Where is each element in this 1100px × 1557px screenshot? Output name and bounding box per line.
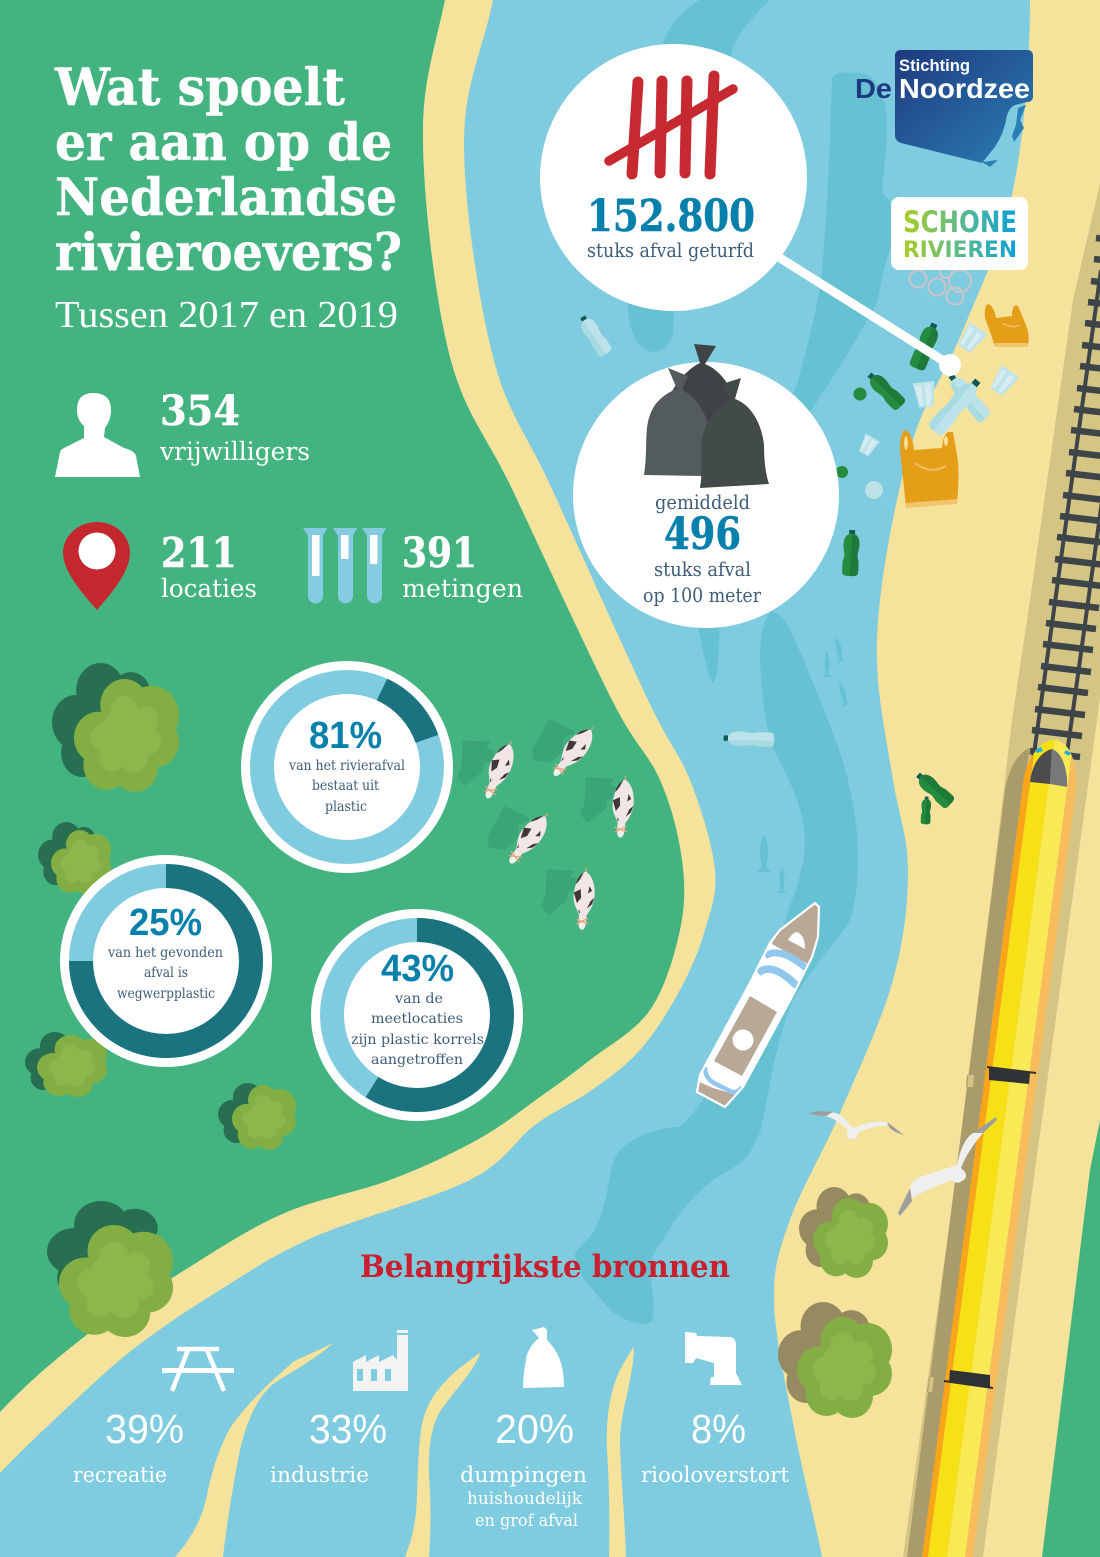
left green meadow — [0, 0, 684, 1412]
icon: garbage bags — [644, 344, 769, 488]
icon: map pin — [63, 522, 130, 610]
circle: average per 100 meter — [573, 344, 839, 628]
source: sewer overflow — [641, 1332, 790, 1487]
logo: Schone Rivieren: RIVIEREN — [903, 238, 1017, 263]
source: recreation: 39% — [105, 1406, 184, 1452]
seagull 2 — [898, 1117, 997, 1216]
source: recreation: recreatie — [73, 1463, 167, 1487]
donut: 81% plastic: 81% — [309, 715, 382, 757]
stat: measurements: 391 — [402, 529, 477, 577]
donut: 25% single-use plastic: afval is — [144, 965, 188, 981]
title: er aan op de — [55, 113, 392, 173]
icon: pipe — [685, 1332, 742, 1385]
title — [54, 58, 402, 283]
average caption — [643, 557, 761, 607]
donut: 43% plastic pellets: van de — [394, 991, 443, 1007]
title: Nederlandse — [55, 168, 397, 228]
donut: 25% single-use plastic — [60, 855, 272, 1067]
logo: Stichting De Noordzee — [855, 50, 1033, 167]
source: recreation — [73, 1349, 234, 1487]
railway ballast — [903, 183, 1100, 1557]
logo: Schone Rivieren: SCHONE — [903, 205, 1017, 239]
circle: total litter count — [540, 44, 807, 311]
stat: volunteers: 354 — [160, 387, 240, 435]
boat — [692, 900, 822, 1110]
yellow train — [922, 730, 1090, 1557]
stat: volunteers: vrijwilligers — [159, 437, 310, 466]
logo: Stichting De Noordzee: Noordzee — [899, 73, 1030, 104]
source: industry: 33% — [309, 1406, 387, 1452]
tree 2 — [38, 822, 111, 894]
source: dumping: dumpingen — [460, 1463, 587, 1487]
connector line — [780, 258, 961, 376]
tree 3 — [25, 1032, 107, 1097]
title: Wat spoelt — [54, 58, 345, 118]
source: dumping — [460, 1327, 587, 1531]
icon: person — [55, 393, 140, 477]
donut: 43% plastic pellets: 43% — [381, 948, 454, 990]
donut: 81% plastic: bestaat uit — [312, 778, 379, 794]
tree 5 — [47, 1201, 173, 1337]
source: sewer overflow: 8% — [691, 1406, 746, 1452]
logo: Schone Rivieren — [891, 197, 1028, 270]
donut: 81% plastic: plastic — [325, 799, 367, 815]
six-pack rings — [910, 266, 971, 304]
source: dumping: huishoudelijk — [467, 1489, 583, 1509]
stat: locations: 211 — [161, 529, 237, 577]
stat: measurements — [303, 528, 523, 604]
donut: 81% plastic — [241, 661, 453, 873]
heading: main sources: Belangrijkste bronnen — [360, 1249, 730, 1285]
subtitle: Tussen 2017 en 2019 — [55, 294, 398, 336]
stat: locations: locaties — [161, 574, 257, 603]
source: dumping: 20% — [495, 1406, 574, 1452]
donut: 43% plastic pellets — [311, 909, 523, 1121]
donut: 81% plastic: van het rivierafval — [288, 758, 405, 774]
train shadow — [907, 748, 1030, 1557]
source: dumping: en grof afval — [475, 1511, 578, 1531]
donut: 43% plastic pellets: meetlocaties — [371, 1011, 463, 1027]
average label: gemiddeld — [655, 490, 750, 514]
donut: 25% single-use plastic: van het gevonden — [107, 945, 223, 961]
tree 1 — [52, 663, 179, 792]
total number: 152.800 — [587, 191, 755, 242]
source: industry — [270, 1330, 408, 1487]
icon: test tubes — [303, 528, 386, 604]
seagull 1 — [809, 1111, 904, 1139]
icon: factory — [353, 1330, 408, 1391]
icon: waste sack — [523, 1327, 564, 1388]
total caption: stuks afval geturfd — [587, 238, 754, 262]
tree 4 — [218, 1083, 296, 1150]
stat: locations — [63, 522, 257, 610]
fish silhouettes — [757, 636, 850, 893]
stat: volunteers — [55, 387, 310, 477]
donut: 25% single-use plastic: wegwerpplastic — [117, 986, 215, 1002]
logo: Stichting De Noordzee: De — [855, 73, 892, 104]
train coupling 1 — [987, 1067, 1036, 1084]
orange plastic bags — [900, 304, 1029, 508]
donut: 25% single-use plastic: 25% — [129, 902, 202, 944]
cow shadows — [459, 721, 616, 913]
donut: 43% plastic pellets: zijn plastic korrels — [351, 1032, 484, 1048]
green bottles and dots — [836, 320, 956, 824]
average caption: stuks afval — [654, 557, 751, 581]
donut: 43% plastic pellets: aangetroffen — [371, 1052, 463, 1068]
source: sewer overflow: riooloverstort — [641, 1463, 790, 1487]
right riverbank sand — [774, 0, 1100, 1557]
average caption: op 100 meter — [643, 583, 761, 607]
icon: tally marks — [609, 76, 733, 174]
right green field — [1042, 1120, 1100, 1557]
pale plastic bottles and cups — [576, 313, 1019, 747]
average number: 496 — [664, 509, 741, 560]
cows — [459, 721, 636, 930]
tree 6 — [799, 1187, 888, 1278]
title: rivieroevers? — [55, 223, 402, 283]
logo: Stichting De Noordzee: Stichting — [899, 56, 970, 75]
train windscreen — [1030, 747, 1071, 787]
tree 7 — [778, 1302, 892, 1418]
railway track — [1029, 238, 1100, 790]
river depth patches — [575, 0, 896, 1324]
train coupling 2 — [944, 1370, 993, 1388]
stat: measurements: metingen — [402, 574, 523, 603]
left riverbank sand — [0, 0, 716, 1473]
source: industry: industrie — [270, 1463, 369, 1487]
icon: picnic table — [162, 1349, 234, 1391]
delta sand strips — [175, 1343, 634, 1557]
